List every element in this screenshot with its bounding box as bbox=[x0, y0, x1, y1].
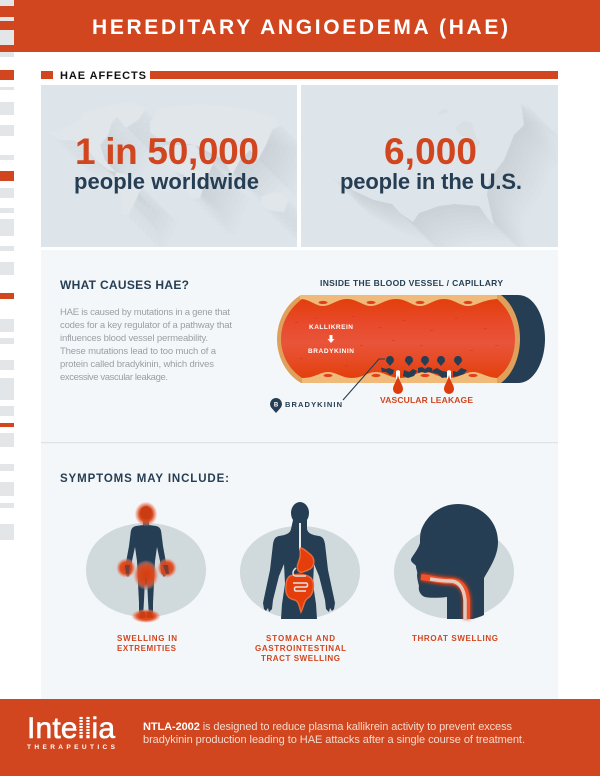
vessel back opening bbox=[495, 295, 545, 383]
vessel wall bbox=[277, 295, 520, 383]
legend: bradykinin: B bbox=[274, 402, 279, 408]
label: stomach and GI swelling: GASTROINTESTINAL bbox=[255, 644, 346, 653]
vessel lumen bbox=[281, 299, 515, 378]
panel: symptoms bbox=[41, 444, 558, 699]
explanatory text: influences blood vessel permeability. bbox=[60, 333, 208, 344]
label: kallikrein to bradykinin: BRADYKININ bbox=[308, 348, 354, 355]
explanatory text: excessive vascular leakage. bbox=[60, 372, 168, 383]
label: stomach and GI swelling: TRACT SWELLING bbox=[261, 654, 340, 663]
endothelium bottom wave bbox=[302, 372, 497, 383]
icon: head with throat swelling bbox=[394, 504, 514, 619]
U.S. map with long shadow bbox=[346, 106, 549, 242]
logo: Intellia Therapeutics: Intellia bbox=[27, 712, 115, 745]
section heading: HAE affects: HAE AFFECTS bbox=[60, 70, 146, 82]
cell nuclei bbox=[318, 301, 478, 377]
left edge decorative strip bbox=[0, 0, 14, 540]
explanatory text: protein called bradykinin, which drives bbox=[60, 359, 214, 370]
label: throat swelling: THROAT SWELLING bbox=[412, 634, 498, 643]
stomach and intestines bbox=[286, 548, 314, 612]
icon: body with GI tract swelling bbox=[240, 502, 360, 619]
endothelium top wave bbox=[300, 295, 497, 306]
world map with long shadow bbox=[100, 123, 297, 228]
explanatory text: HAE is caused by mutations in a gene that bbox=[60, 307, 230, 318]
explanatory text: These mutations lead to too much of a bbox=[60, 346, 217, 357]
icon: body with swollen extremities bbox=[86, 502, 206, 623]
panel: what causes HAE bbox=[41, 250, 558, 444]
label: kallikrein to bradykinin: KALLIKREIN bbox=[309, 324, 353, 331]
title: HEREDITARY ANGIOEDEMA (HAE) bbox=[92, 16, 508, 39]
bradykinin markers bbox=[386, 356, 462, 366]
pointer line to bradykinin bbox=[343, 359, 385, 400]
heading: symptoms: SYMPTOMS MAY INCLUDE: bbox=[60, 473, 229, 485]
panel: 6,000 in the U.S. bbox=[301, 85, 558, 247]
header banner bbox=[14, 0, 600, 52]
footer text bbox=[143, 721, 525, 746]
explanatory text: codes for a key regulator of a pathway that bbox=[60, 320, 232, 331]
panel: 1 in 50,000 worldwide bbox=[41, 85, 297, 247]
label: stomach and GI swelling bbox=[255, 634, 346, 663]
heading: what causes HAE: WHAT CAUSES HAE? bbox=[60, 278, 189, 292]
receptors bbox=[381, 367, 467, 378]
throat glow bbox=[421, 577, 467, 619]
stat label: people worldwide: people worldwide bbox=[74, 169, 259, 194]
footer text: NTLA-2002 is designed to reduce plasma kallikrein activity to prevent excess bbox=[143, 721, 512, 733]
esophagus bbox=[299, 523, 301, 550]
legend: bradykinin bbox=[270, 398, 342, 413]
vessel diagram heading: INSIDE THE BLOOD VESSEL / CAPILLARY bbox=[320, 278, 503, 288]
label: stomach and GI swelling: STOMACH AND bbox=[266, 634, 335, 643]
label: swelling in extremities: SWELLING IN bbox=[117, 634, 177, 643]
explanatory text bbox=[60, 307, 232, 383]
section heading: HAE affects bbox=[41, 70, 558, 82]
swelling glows bbox=[116, 502, 177, 623]
stat label: people in the U.S.: people in the U.S. bbox=[340, 169, 522, 194]
blood vessel diagram bbox=[277, 295, 545, 394]
label: swelling in extremities: EXTREMITIES bbox=[117, 644, 177, 653]
stat: 1 in 50,000: 1 in 50,000 bbox=[75, 131, 259, 172]
label: vascular leakage: VASCULAR LEAKAGE bbox=[380, 395, 473, 405]
blood cell speckles bbox=[295, 316, 498, 366]
leak drops bbox=[393, 370, 454, 394]
stat: 6,000: 6,000 bbox=[384, 131, 477, 172]
footer banner bbox=[0, 699, 600, 776]
label: kallikrein to bradykinin bbox=[308, 324, 354, 355]
logo: Intellia Therapeutics: THERAPEUTICS bbox=[27, 744, 116, 751]
label: swelling in extremities bbox=[117, 634, 177, 653]
legend: bradykinin: BRADYKININ bbox=[285, 400, 342, 409]
footer text: bradykinin production leading to HAE attacks after a single course of treatment. bbox=[143, 734, 525, 746]
